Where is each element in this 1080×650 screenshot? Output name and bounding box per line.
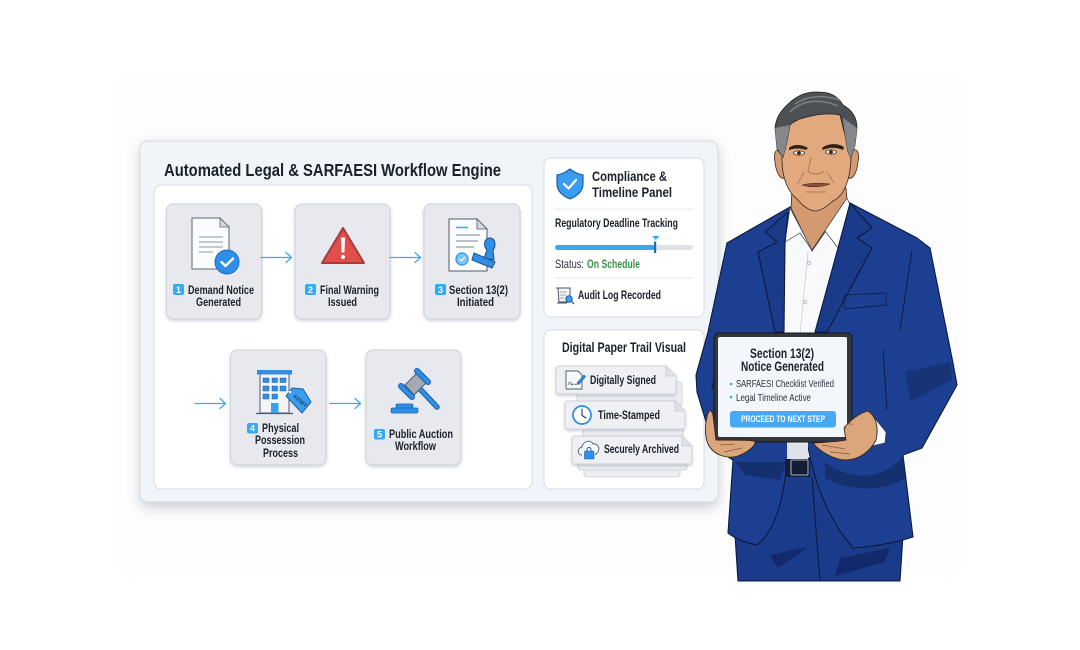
panel heading: Timeline Panel [592, 184, 672, 200]
deadline tracking label: Regulatory Deadline Tracking [555, 216, 678, 230]
hair [775, 92, 857, 158]
title: Automated Legal & SARFAESI Workflow Engine [164, 160, 501, 180]
label: step 2: 2 [308, 285, 313, 295]
label: step 2: Issued [328, 295, 357, 309]
icon: warning triangle [322, 228, 364, 263]
label: step 4: Physical [262, 421, 299, 435]
neck and collar [785, 188, 850, 251]
tablet heading: Section 13(2) [750, 345, 814, 361]
tablet [714, 333, 852, 442]
icon: building with asset tag: ASSET [291, 393, 308, 409]
face [782, 110, 851, 211]
label: step 5: 5 [377, 430, 382, 440]
shirt [783, 203, 850, 460]
label: step 1: 1 [176, 285, 181, 295]
main panel: workflow engine [140, 141, 718, 502]
tablet heading: Notice Generated [741, 358, 824, 374]
presenter: man in blue suit holding tablet [696, 92, 957, 581]
sheet: digitally signed: Digitally Signed [590, 373, 656, 387]
stacked back sheets [577, 382, 687, 477]
step 2: final warning [295, 204, 390, 319]
icon: stamped document [449, 219, 495, 271]
icon: cloud lock [578, 441, 599, 459]
workflow area [154, 185, 532, 489]
sheet: time-stamped [565, 401, 685, 429]
tablet screen [718, 337, 847, 437]
progress bar [555, 236, 693, 253]
sheet: securely archived [572, 436, 692, 464]
status line [555, 257, 640, 271]
ears [774, 150, 859, 178]
left hand [705, 411, 755, 457]
belt [785, 459, 810, 477]
lapels [758, 203, 886, 332]
label: step 2: Final Warning [320, 283, 379, 297]
label: step 3: Section 13(2) [449, 283, 508, 297]
step 3: section 13(2) [424, 204, 520, 319]
audit log label: Audit Log Recorded [578, 288, 661, 302]
step 4: physical possession [230, 350, 326, 465]
label: step 5 [374, 427, 453, 453]
label: step 3: Initiated [457, 295, 494, 309]
sheet: digitally signed [556, 366, 676, 394]
panel: digital paper trail [544, 330, 704, 489]
tablet heading [741, 345, 824, 374]
tablet checklist: SARFAESI Checklist Verified [736, 378, 834, 390]
status line: On Schedule [587, 257, 640, 271]
sheet: time-stamped: Time-Stamped [598, 408, 660, 422]
label: step 3: 3 [438, 285, 443, 295]
label: step 4: Process [263, 446, 298, 460]
icon: document with check [192, 218, 239, 274]
right hand [813, 411, 877, 460]
icon: audit log [556, 288, 574, 304]
arrow: step 4 to 5 [330, 398, 360, 408]
step 1: demand notice [166, 204, 262, 319]
tablet checklist [730, 378, 834, 404]
panel: compliance and timeline [544, 158, 704, 317]
label: step 4: Possession [255, 433, 305, 447]
label: step 1: Generated [196, 295, 241, 309]
label: step 1: Demand Notice [188, 283, 254, 297]
panel heading [592, 168, 672, 200]
label: step 2 [305, 283, 379, 309]
suit jacket [696, 203, 957, 548]
sheet: securely archived: Securely Archived [604, 442, 679, 456]
label: step 4: 4 [250, 424, 255, 434]
arrow: step 1 to 2 [261, 252, 292, 262]
label: step 5: Public Auction [389, 427, 453, 441]
tablet checklist: Legal Timeline Active [736, 392, 811, 404]
label: step 1 [173, 283, 254, 309]
label: step 5: Workflow [395, 439, 437, 453]
label: step 3 [435, 283, 508, 309]
trousers [735, 458, 903, 581]
panel heading: Digital Paper Trail Visual [562, 339, 686, 355]
status line: Status: [555, 257, 584, 271]
arrow: continuation into step 4 [195, 398, 226, 408]
icon: shield [557, 169, 583, 199]
icon: gavel [391, 371, 437, 413]
button: PROCEED TO NEXT STEP [741, 414, 825, 424]
icon: signed page [566, 371, 586, 389]
arrow: step 2 to 3 [390, 252, 420, 262]
panel heading: Compliance & [592, 168, 667, 184]
right cuff [868, 410, 886, 446]
icon: clock [573, 406, 591, 424]
label: step 4 [247, 421, 305, 460]
step 5: public auction [366, 350, 461, 465]
